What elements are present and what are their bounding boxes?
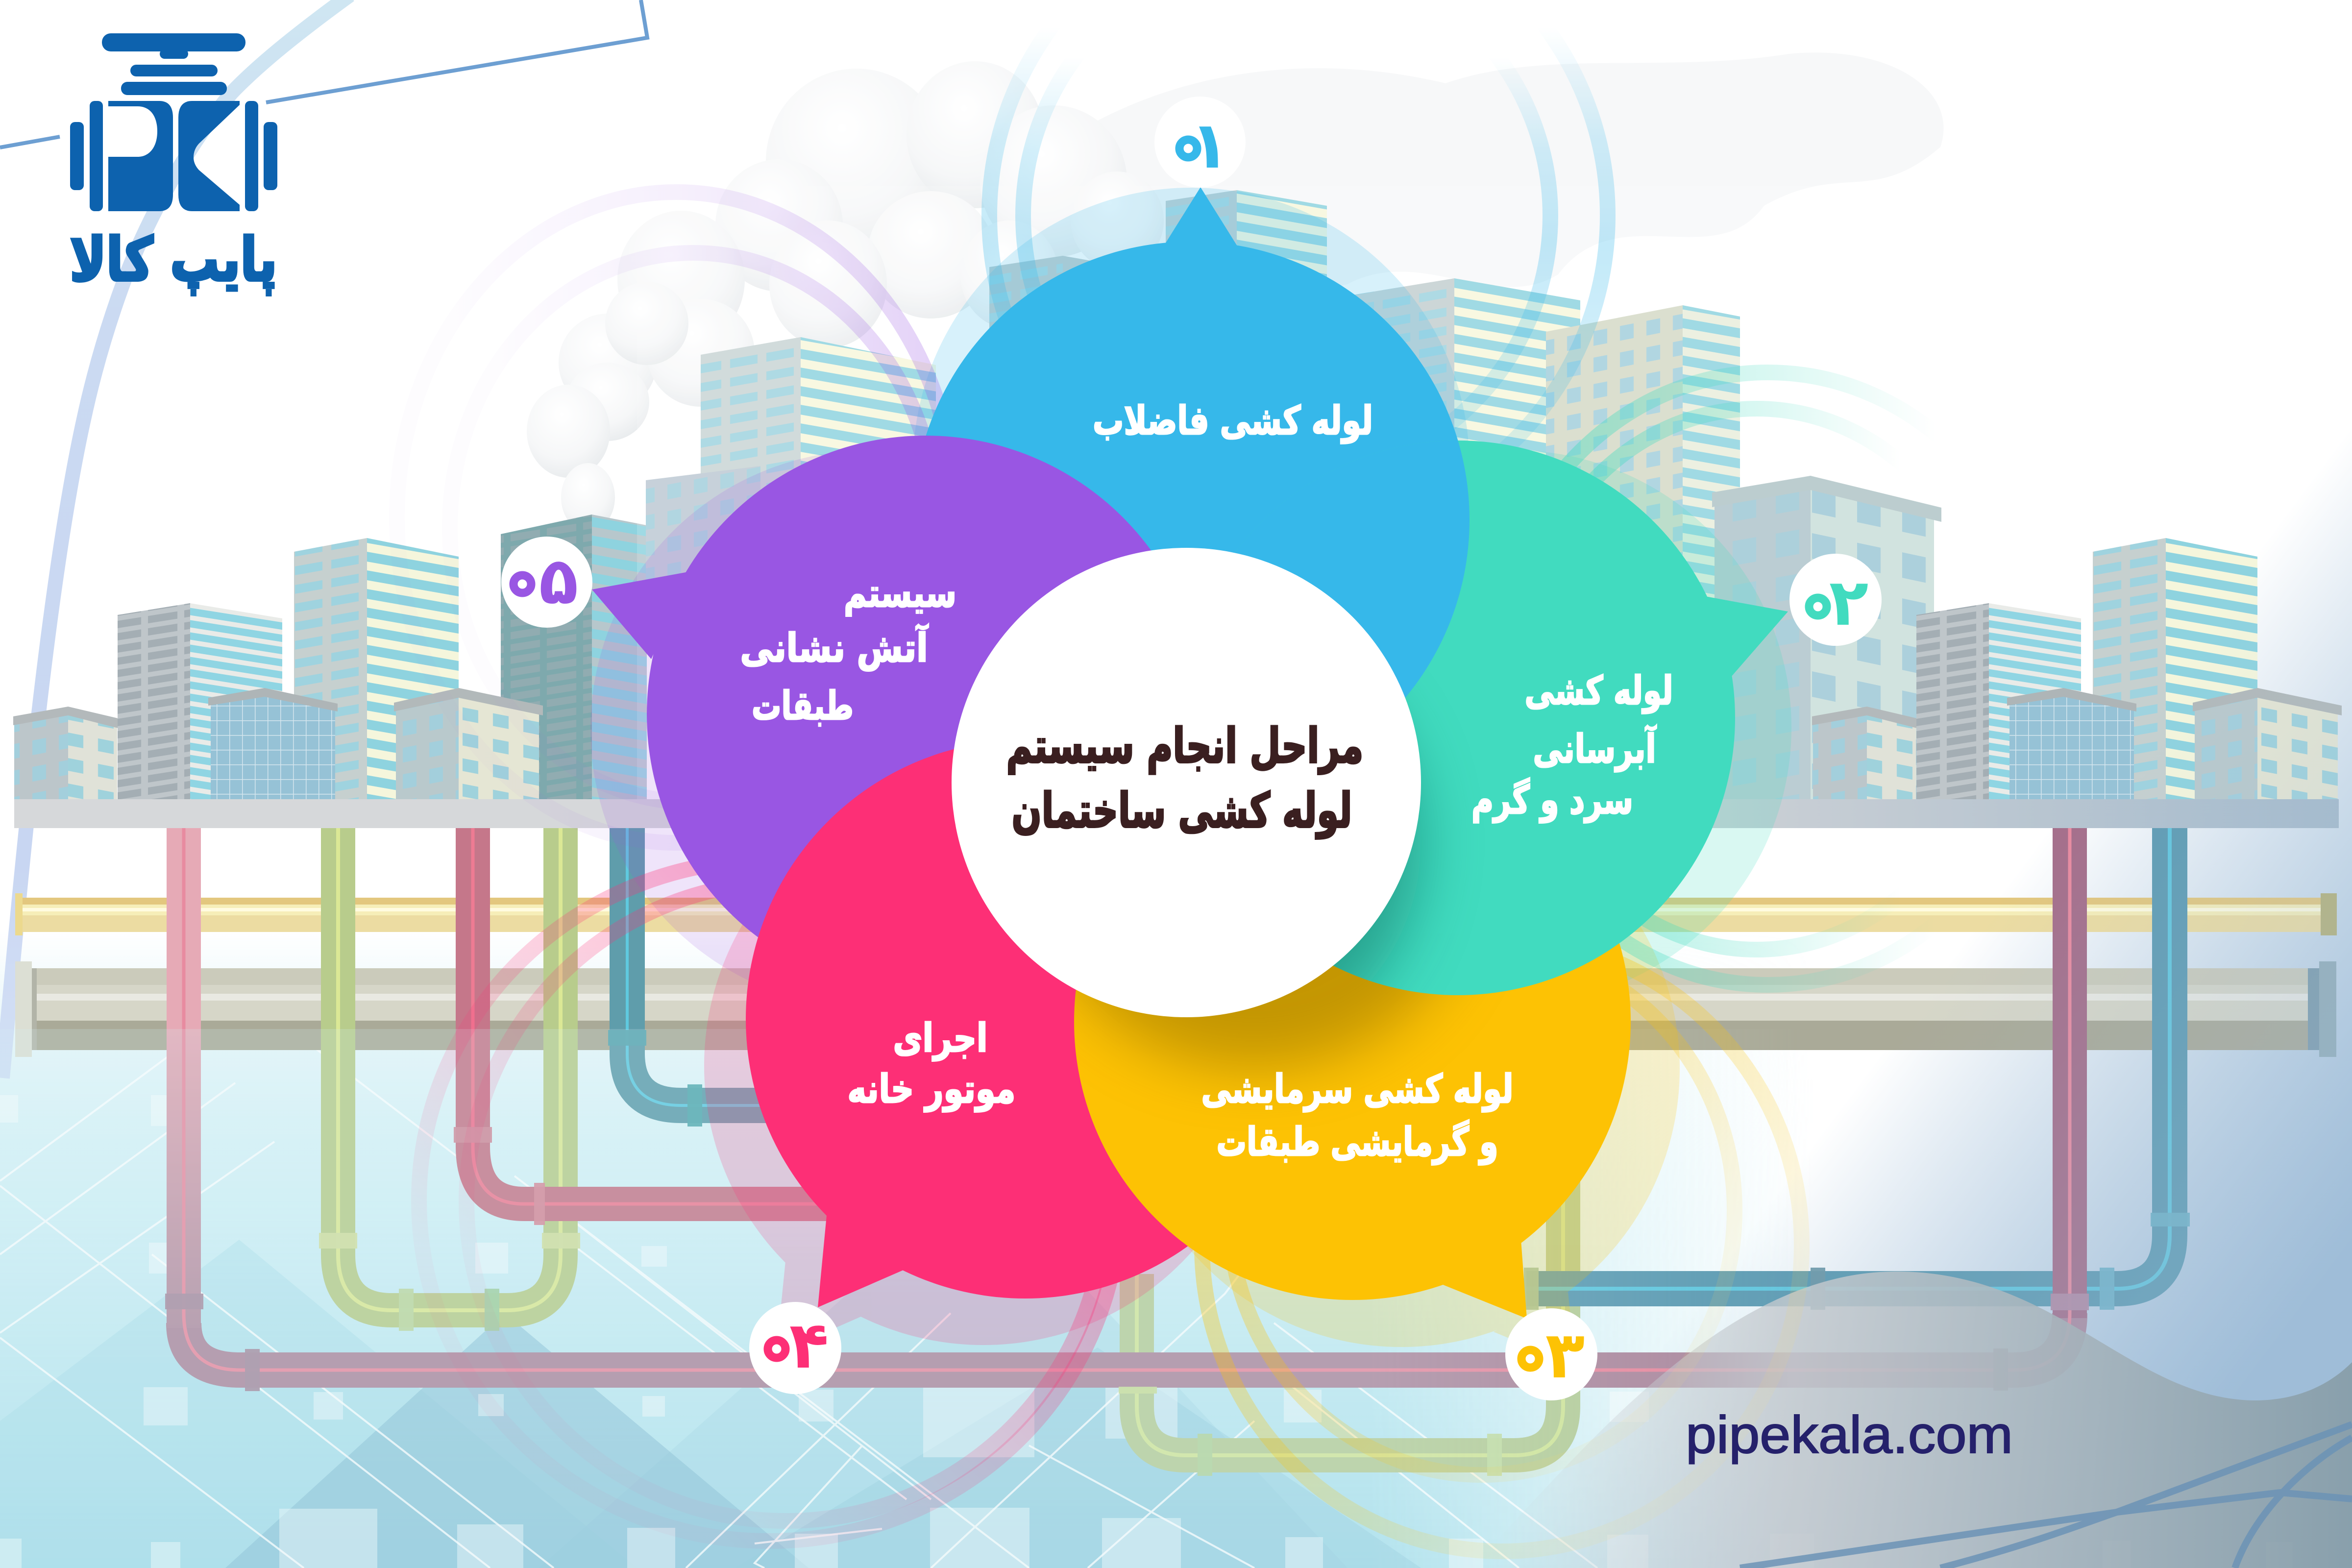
pipe: green U	[338, 828, 561, 1310]
hill, bottom right	[1470, 1272, 2352, 1568]
website url: pipekala.com	[1686, 1405, 2013, 1464]
number badge 04	[749, 1302, 841, 1394]
text: step 5	[740, 570, 956, 729]
number badge 04: ۰	[757, 1308, 796, 1383]
tint washes over pipes and right buildings	[0, 669, 2352, 1568]
text: step 5: طبقات	[752, 683, 854, 729]
number badge 02: ۲	[1829, 565, 1868, 640]
center title	[1006, 718, 1363, 839]
bubble 3: yellow	[1074, 943, 1631, 1317]
arcs: blue	[989, 0, 1608, 529]
number badge 05: ۰	[503, 543, 542, 619]
bubble 2: green	[1235, 441, 1788, 995]
arcs: green	[1489, 372, 2047, 985]
text: step 2: سرد و گرم	[1471, 777, 1633, 823]
text: step 3	[1201, 1066, 1513, 1165]
buildings: left group	[13, 538, 543, 799]
halo: purple	[590, 450, 1148, 1008]
logo wordmark: پایپ کالا	[70, 225, 277, 295]
buildings: center group	[637, 186, 1960, 799]
top left outline	[0, 0, 647, 147]
number badge 02	[1789, 554, 1882, 646]
text: step 4	[848, 1015, 1015, 1112]
text: step 3: لوله کشی سرمایشی	[1201, 1066, 1513, 1112]
network lines, bottom right	[1740, 1424, 2352, 1568]
buildings: right group	[1812, 538, 2342, 799]
text: step 2	[1471, 668, 1673, 823]
arcs: yellow	[1202, 939, 1802, 1551]
text: step 4: موتور خانه	[848, 1066, 1015, 1112]
bubble 1 overlap above green	[913, 242, 1470, 798]
text: step 2: لوله کشی	[1525, 668, 1673, 714]
smoke clouds	[527, 52, 1943, 532]
halo: pink	[704, 786, 1263, 1354]
building: teal tower behind left group	[501, 514, 647, 799]
center title: لوله کشی ساختمان	[1011, 783, 1352, 839]
bubble 4: pink	[746, 740, 1304, 1307]
decorative left arc	[2, 0, 350, 1078]
text: step 2: آبرسانی	[1533, 725, 1657, 772]
halo: blue	[913, 188, 1470, 744]
number badge 03	[1505, 1308, 1597, 1400]
pipe: olive bottom	[1137, 1176, 1563, 1455]
number badge 05: ۵	[539, 543, 578, 619]
pipe: blue right	[1526, 828, 2170, 1289]
center circle	[952, 548, 1421, 1017]
pipe couplers	[165, 1030, 2190, 1476]
number badge 02: ۰	[1798, 565, 1838, 640]
text: step 5: آتش نشانی	[740, 624, 929, 671]
bubble 5: purple	[592, 436, 1204, 993]
number badge 03: ۰	[1511, 1318, 1550, 1393]
pipe: red	[473, 828, 833, 1204]
pipe: pink long	[184, 828, 2070, 1370]
text: step 1: لوله کشی فاضلاب	[1093, 398, 1373, 444]
text: step 4: اجرای	[893, 1015, 988, 1061]
number badge 01	[1154, 97, 1246, 188]
number badge 05	[501, 537, 592, 628]
text: step 5: سیستم	[844, 570, 956, 616]
number badge 01: ۱	[1190, 108, 1229, 183]
arcs: pink	[419, 860, 1120, 1541]
vertical pipes	[184, 828, 2170, 1455]
platform	[14, 799, 2339, 828]
logo	[70, 33, 277, 295]
arcs: purple	[397, 192, 956, 843]
number badge 03: ۳	[1545, 1318, 1585, 1393]
bubble 1: blue	[913, 187, 1470, 798]
pipe: teal	[627, 828, 804, 1105]
number badge 04: ۴	[789, 1308, 829, 1383]
halo: yellow	[1123, 790, 1680, 1366]
horizontal pipes	[15, 893, 2337, 1057]
background	[0, 496, 2352, 1568]
halo: green	[1237, 450, 1791, 1005]
concentric arcs	[397, 0, 2047, 1551]
logo icon: valve	[70, 33, 277, 211]
bubble halos	[590, 188, 1791, 1366]
text: step 3: و گرمایشی طبقات	[1216, 1119, 1498, 1165]
center title: مراحل انجام سیستم	[1006, 718, 1363, 775]
number badge 01: ۰	[1169, 108, 1208, 183]
